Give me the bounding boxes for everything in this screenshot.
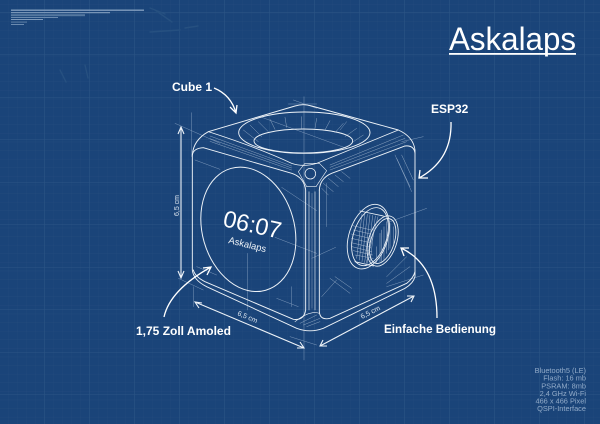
technical specifications: QSPI-Interface — [537, 404, 586, 413]
technical specifications: Flash: 16 mb — [543, 374, 586, 382]
clock time: 06:07 — [221, 205, 284, 244]
technical specifications: Bluetooth5 (LE) — [535, 366, 586, 375]
label: ESP32 — [419, 102, 469, 178]
label: Cube 1 — [172, 80, 237, 113]
technical specifications: 466 x 466 Pixel — [535, 396, 586, 406]
label: Cube 1: Cube 1 — [172, 80, 212, 94]
top hollow — [239, 112, 370, 153]
display circle — [187, 156, 310, 303]
label: ESP32: ESP32 — [431, 102, 469, 116]
decorative header lines — [11, 10, 144, 25]
label: Einfache Bedienung: Einfache Bedienung — [384, 322, 496, 336]
cube drawing — [175, 97, 427, 360]
technical specifications: PSRAM: 8mb — [541, 382, 586, 390]
dial knob — [340, 199, 404, 274]
label: 1,75 Zoll Amoled — [136, 267, 231, 338]
title: Askalaps — [449, 21, 576, 57]
label: Einfache Bedienung — [384, 248, 496, 336]
dimension: left width — [195, 302, 304, 348]
label: 1,75 Zoll Amoled: 1,75 Zoll Amoled — [136, 324, 231, 338]
cube outline — [192, 105, 415, 331]
dimension: right width: 6,5 cm — [360, 305, 382, 321]
dimension: right width — [320, 296, 414, 346]
technical specifications: 2,4 GHz Wi-Fi — [540, 389, 586, 398]
dimension: left width: 6,5 cm — [236, 310, 258, 325]
edge hatching — [210, 117, 413, 327]
technical specifications — [535, 366, 586, 413]
construction lines — [175, 97, 427, 360]
dimension: height: 6,5 cm — [174, 195, 181, 216]
dimension: height — [174, 127, 184, 278]
clock label: Askalaps — [227, 235, 268, 255]
